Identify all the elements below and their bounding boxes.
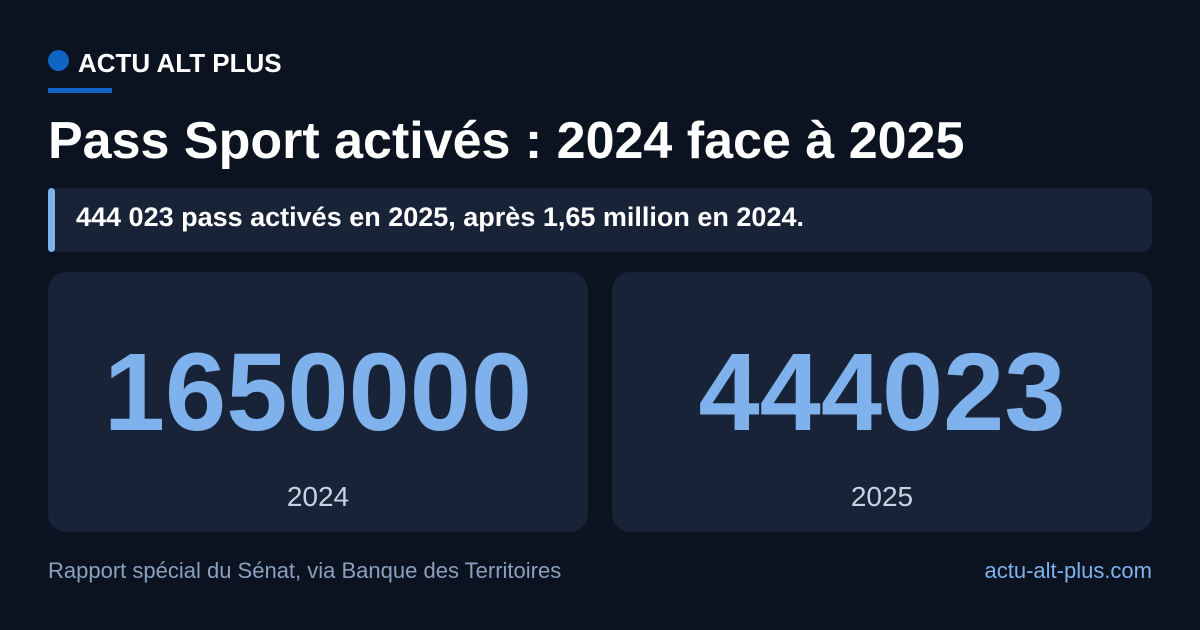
panel: 2024 xyxy=(48,272,588,532)
banner text: 444 023 pass activés en 2025, après 1,65 million en 2024. xyxy=(76,202,804,232)
panel: 2025 xyxy=(612,272,1152,532)
banner accent bar xyxy=(48,188,55,252)
2024 label: 2024 xyxy=(287,481,349,512)
summary banner xyxy=(48,188,1152,252)
2025 label: 2025 xyxy=(851,481,913,512)
2025 value: 444023 xyxy=(698,331,1066,454)
title: Pass Sport activés : 2024 face à 2025 xyxy=(48,112,964,170)
brand header xyxy=(48,48,282,93)
source text: Rapport spécial du Sénat, via Banque des Territoires xyxy=(48,558,561,583)
brand name: ACTU ALT PLUS xyxy=(78,48,282,78)
icon: brand dot xyxy=(48,50,69,71)
site url: actu-alt-plus.com xyxy=(984,558,1152,583)
2024 value: 1650000 xyxy=(104,331,532,454)
brand underline xyxy=(48,88,112,93)
